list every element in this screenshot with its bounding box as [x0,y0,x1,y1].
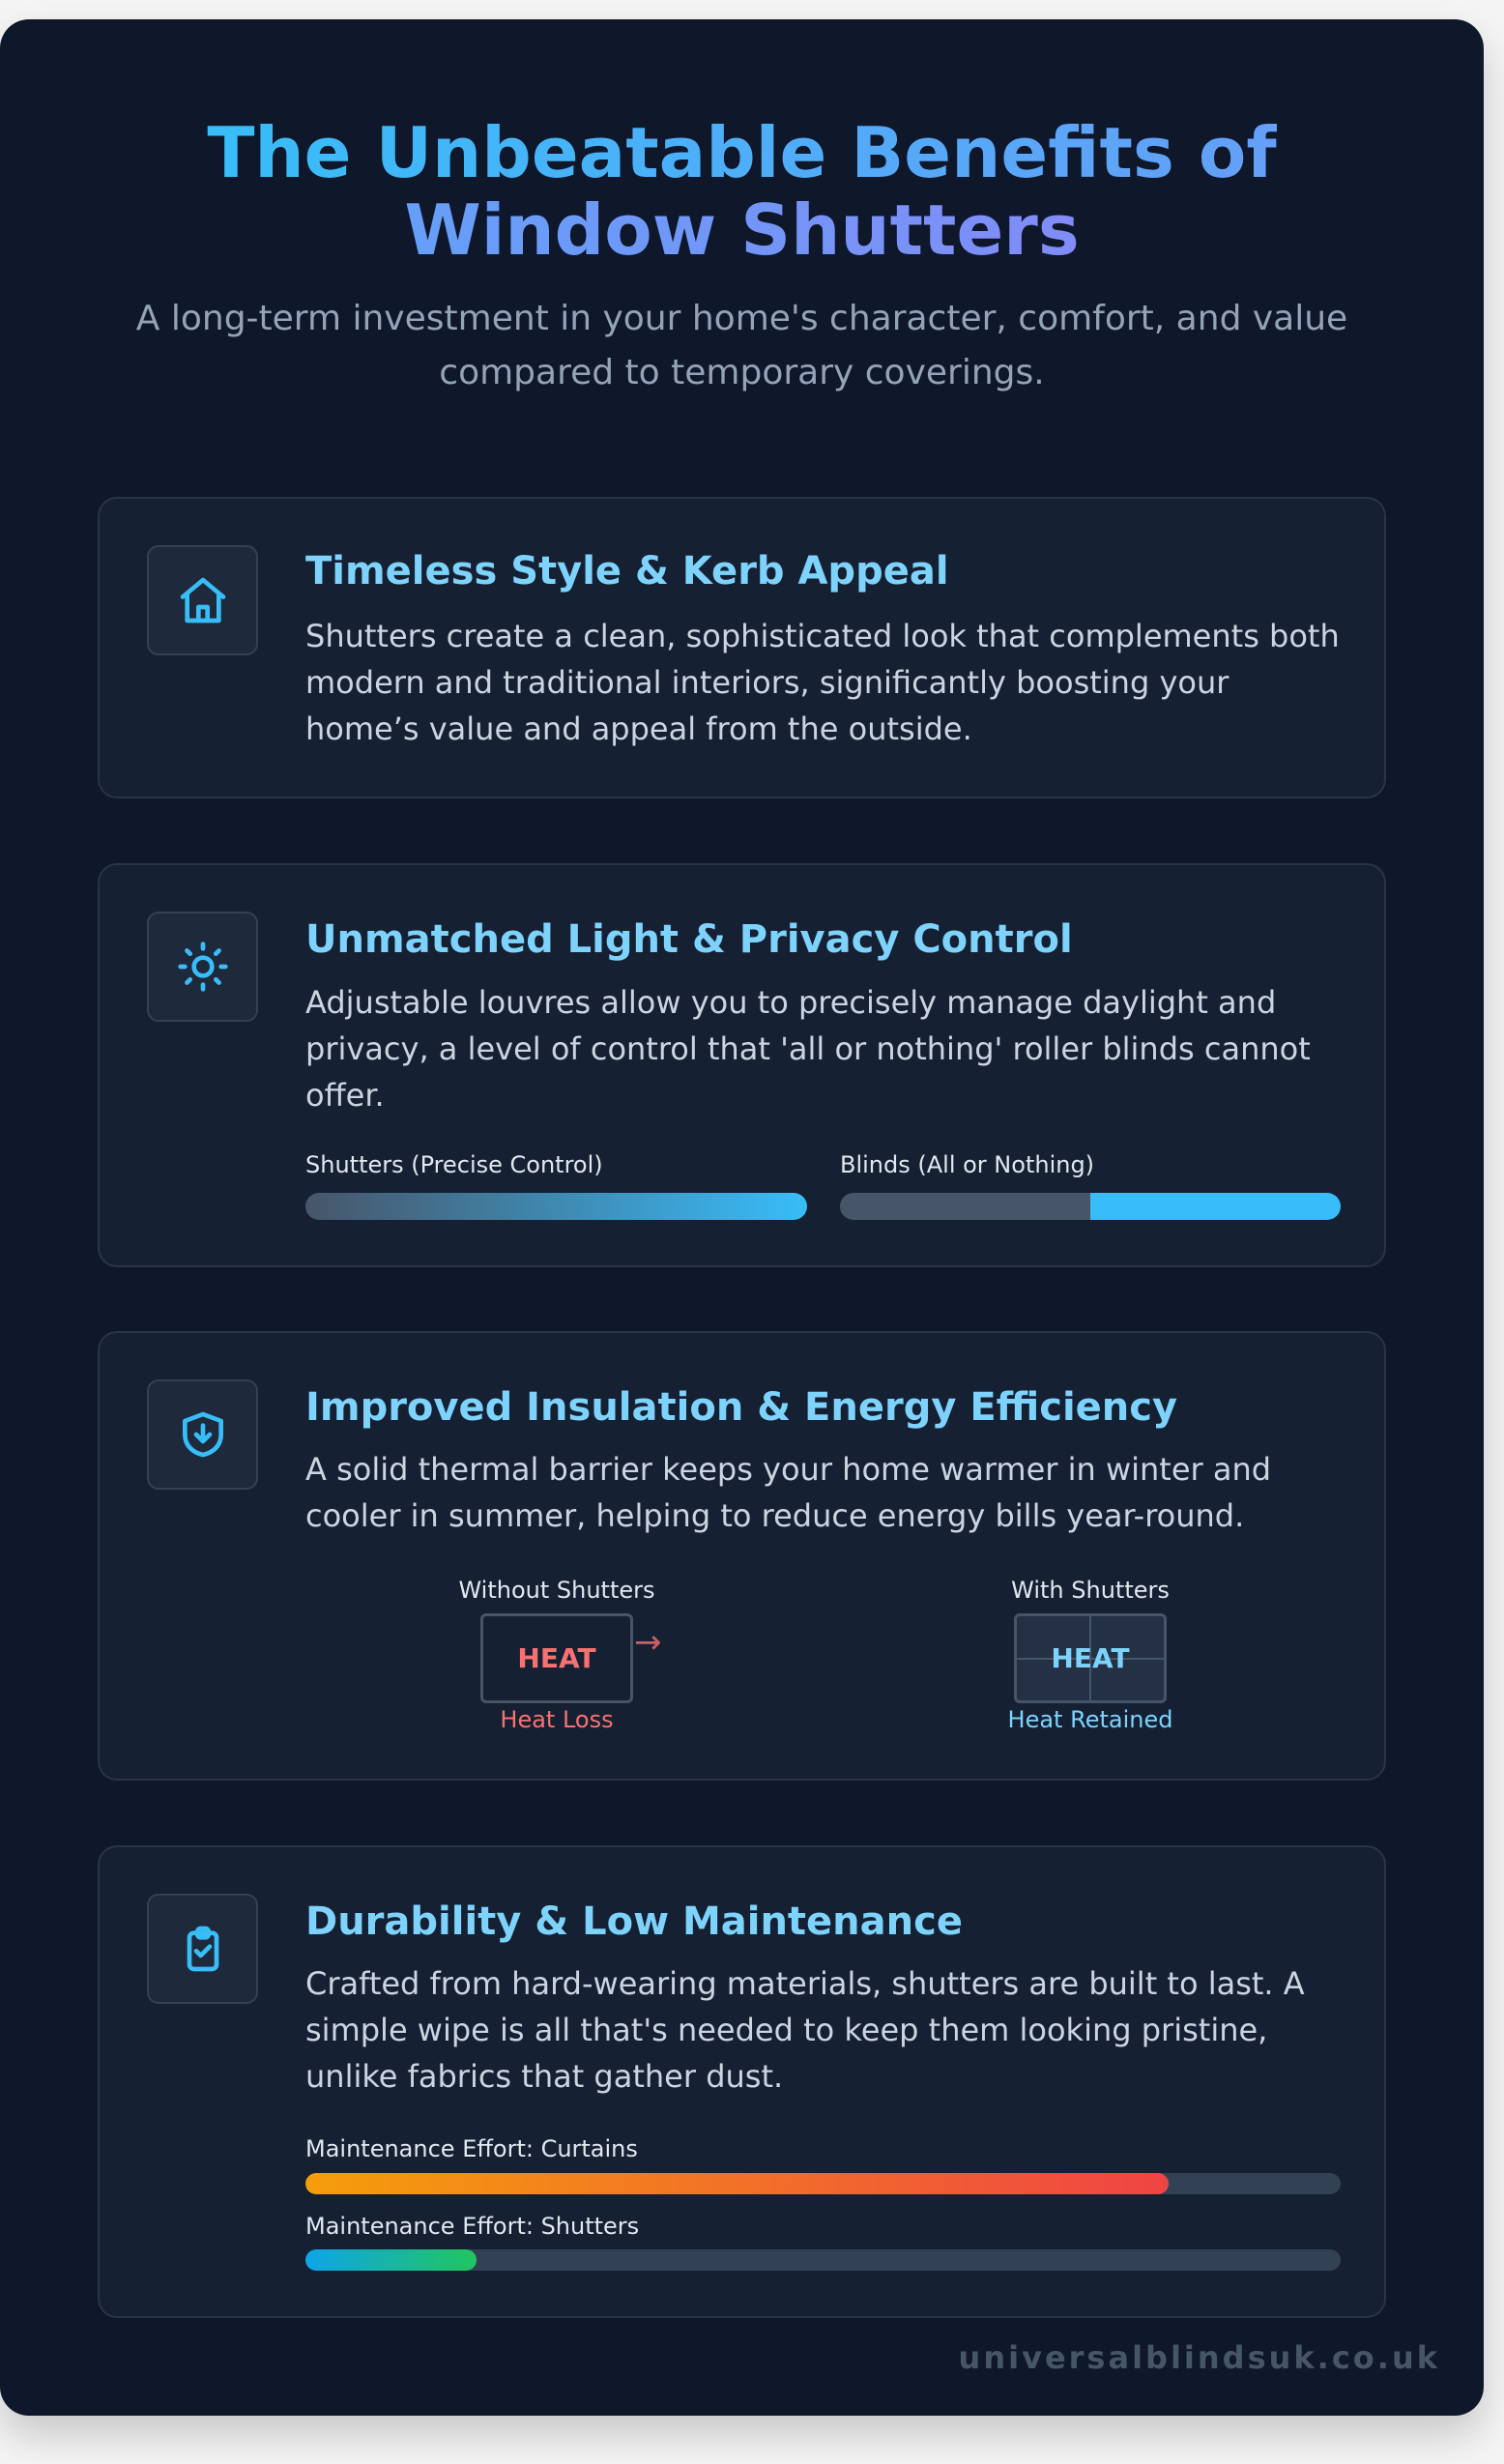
panel: insulation [98,1331,1386,1781]
title [207,112,1277,271]
icon: clipboard [147,1894,258,2004]
diagram: without shutters: Heat Loss [500,1706,614,1733]
footer url: universalblindsuk.co.uk [959,2339,1440,2376]
text: A solid thermal barrier keeps your home warmer in winter and cooler in summer, helping to reduce energy bills year-round. [305,1451,1271,1534]
diagram: with shutters [1008,1577,1172,1733]
diagram: without shutters [458,1577,661,1733]
icon: house [147,545,258,655]
arrow: → [634,1623,661,1662]
heading: Timeless Style & Kerb Appeal [305,549,949,594]
bar: blinds: Blinds (All or Nothing) [840,1151,1094,1178]
panel: light & privacy [98,863,1386,1267]
bar: shutters: Shutters (Precise Control) [305,1151,603,1178]
title: Window Shutters [404,189,1080,271]
panel: durability [98,1845,1386,2318]
bar: shutters: Maintenance Effort: Shutters [305,2213,639,2240]
icon: shield [147,1379,258,1490]
diagram: without shutters: Without Shutters [458,1577,655,1604]
diagram: with shutters: Heat Retained [1008,1706,1172,1733]
icon: sun [147,912,258,1022]
heading: Unmatched Light & Privacy Control [305,917,1073,962]
heading: Durability & Low Maintenance [305,1899,963,1944]
text: Adjustable louvres allow you to precisely manage daylight and privacy, a level of control that 'all or nothing' roller blinds cannot offer. [305,984,1311,1114]
subtitle: A long-term investment in your home's character, comfort, and value compared to temporary coverings. [136,299,1347,392]
text: Shutters create a clean, sophisticated look that complements both modern and traditional interiors, significantly boosting your home’s value and appeal from the outside. [305,618,1340,747]
text: Crafted from hard-wearing materials, shutters are built to last. A simple wipe is all that's needed to keep them looking pristine, unlike fabrics that gather dust. [305,1965,1305,2095]
diagram: with shutters: HEAT [1051,1642,1130,1674]
title: The Unbeatable Benefits of [207,112,1277,193]
bar: curtains: Maintenance Effort: Curtains [305,2135,638,2162]
diagram: with shutters: With Shutters [1011,1577,1170,1604]
panel: style [98,497,1386,798]
diagram: without shutters: HEAT [517,1642,596,1674]
heading: Improved Insulation & Energy Efficiency [305,1385,1177,1430]
